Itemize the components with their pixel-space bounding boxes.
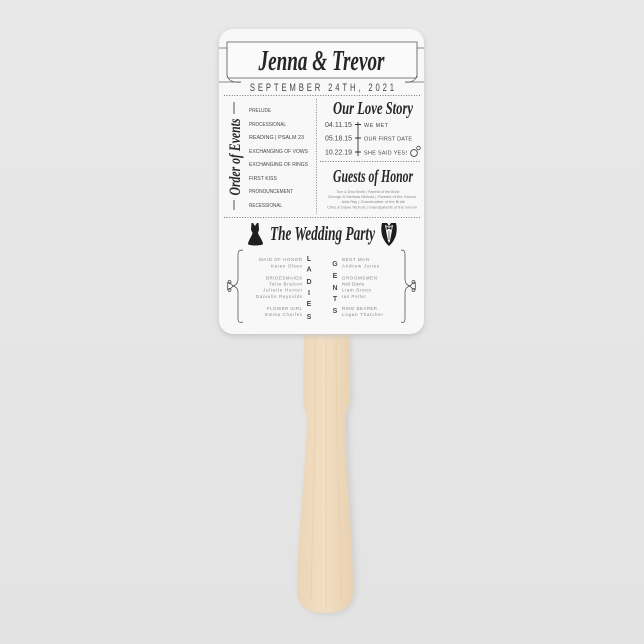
timeline: 10.22.19 (325, 150, 352, 156)
guests list: Julia Ray | Grandmother of the Bride (341, 200, 405, 204)
guests list: Tom & Dina Smith | Parents of the Bride (336, 190, 400, 194)
guests list: Chris & Diane Nichols | Grandparents of the Groom (327, 206, 417, 210)
ladies list: Danielle Reynolds (256, 294, 303, 299)
ladies list: Juliette Hunter (263, 288, 302, 292)
ladies vertical label: D (306, 279, 312, 286)
title: Jenna & Trevor (258, 46, 385, 77)
events list: PRONOUNCEMENT (249, 189, 293, 195)
events list: EXCHANGING OF RINGS (249, 162, 309, 168)
timeline (325, 122, 412, 156)
bracket: right flourish (401, 250, 416, 322)
gents list: Andrew Jones (342, 264, 380, 268)
timeline: 05.18.15 (325, 136, 352, 142)
date line: SEPTEMBER 24TH, 2021 (250, 82, 394, 94)
guests list: George & Melissa Nichols | Parents of the Groom (328, 195, 416, 199)
events list: READING | PSALM 23 (249, 135, 304, 141)
ladies list: BRIDESMAIDS (266, 276, 302, 280)
icon: tuxedo (381, 223, 397, 246)
gents vertical label: N (332, 285, 338, 292)
bracket: left flourish (227, 250, 243, 322)
ladies vertical label: S (307, 314, 312, 321)
icon: rings (411, 146, 420, 156)
ladies vertical label: A (306, 266, 312, 274)
timeline: 04.11.15 (325, 122, 352, 129)
events list: FIRST KISS (249, 176, 278, 182)
panel: fan card (219, 29, 424, 336)
ladies vertical label: E (307, 301, 312, 308)
ladies vertical label (306, 256, 312, 321)
gents vertical label: T (333, 296, 338, 303)
events list: PRELUDE (249, 108, 272, 114)
gents vertical label: S (333, 308, 338, 315)
events list: PROCESSIONAL (249, 122, 286, 128)
heading: wedding party: The Wedding Party (270, 223, 375, 245)
ladies list: MAID OF HONOR (259, 257, 303, 262)
banner with names (219, 42, 424, 82)
events list: RECESSIONAL (249, 203, 282, 209)
gents list: RING BEARER (342, 306, 378, 311)
gents list: Neil Davis (342, 282, 365, 286)
ladies list: Karen Olsen (271, 264, 302, 268)
gents vertical label (332, 261, 338, 315)
ladies list: Emma Charles (265, 312, 303, 317)
panel: order of events (227, 102, 309, 210)
heading: order of events: Order of Events (227, 118, 244, 196)
gents list (342, 257, 384, 317)
gents list: BEST MAN (342, 257, 369, 262)
panel: the wedding party (227, 223, 416, 322)
timeline: WE MET (364, 123, 389, 129)
panel: guests of honor (327, 166, 417, 210)
timeline: SHE SAID YES! (364, 150, 407, 156)
gents list: Liam Green (342, 288, 371, 292)
events list: EXCHANGING OF VOWS (249, 149, 309, 155)
gents list: Logan Thatcher (342, 312, 384, 317)
ladies vertical label: L (307, 256, 312, 263)
ladies vertical label: I (308, 290, 310, 297)
ladies list: FLOWER GIRL (267, 306, 302, 311)
ladies list (256, 257, 303, 317)
heading: guests of honor: Guests of Honor (333, 166, 414, 186)
icon: wooden fan handle (297, 334, 356, 615)
gents vertical label: E (333, 273, 338, 280)
heading: our love story: Our Love Story (333, 98, 414, 118)
events list (249, 108, 309, 209)
timeline: OUR FIRST DATE (364, 136, 412, 142)
icon: dress (248, 223, 263, 246)
panel: our love story (325, 98, 420, 156)
gents list: GROOMSMEN (342, 276, 377, 280)
gents vertical label: G (332, 261, 338, 268)
gents list: Ian Porter (342, 294, 366, 299)
guests list (327, 190, 417, 210)
ladies list: Talia Bratton (269, 282, 302, 286)
